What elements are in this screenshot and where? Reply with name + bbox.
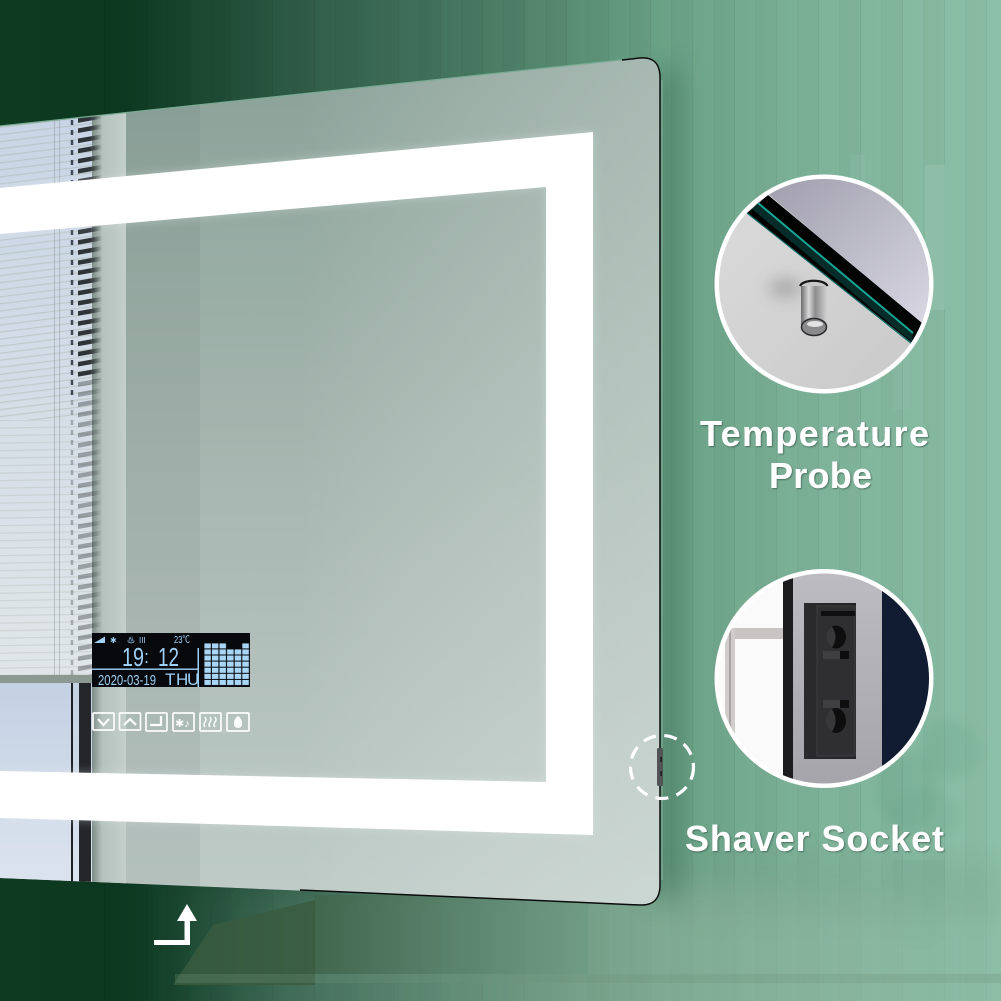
LCD display: THU bbox=[165, 670, 199, 689]
label: Probe: Probe bbox=[769, 455, 872, 496]
label: Temperature: Temperature bbox=[700, 413, 929, 454]
LCD display: III bbox=[139, 636, 146, 645]
shaver socket on mirror edge bbox=[657, 748, 663, 786]
LCD display: ✱ bbox=[110, 636, 117, 645]
icon: corner arrow bbox=[154, 904, 197, 945]
LCD display: : bbox=[144, 647, 149, 667]
mirror shadow bbox=[652, 70, 678, 900]
background: plant and vase bbox=[875, 720, 980, 950]
label: Shaver Socket: Shaver Socket bbox=[685, 818, 944, 859]
LCD display: 23℃ bbox=[174, 635, 190, 646]
LCD display: ♨ bbox=[127, 636, 135, 645]
LCD display: 2020-03-19 bbox=[98, 672, 156, 689]
touch control buttons bbox=[93, 713, 249, 731]
LED light band glow bbox=[0, 132, 593, 835]
panel: illuminated smart mirror bbox=[0, 50, 662, 910]
touch control buttons: ✱♪ bbox=[175, 718, 190, 730]
circle: shaver socket detail bbox=[714, 569, 942, 789]
circle: temperature probe detail bbox=[714, 170, 940, 394]
dashed callout ring bbox=[630, 736, 694, 798]
LED light band bbox=[0, 132, 593, 835]
LCD display: 12 bbox=[158, 642, 179, 672]
background: bottom surface and stand bbox=[0, 855, 1001, 1001]
LCD display: 19 bbox=[122, 642, 144, 672]
LCD display bbox=[92, 633, 250, 689]
